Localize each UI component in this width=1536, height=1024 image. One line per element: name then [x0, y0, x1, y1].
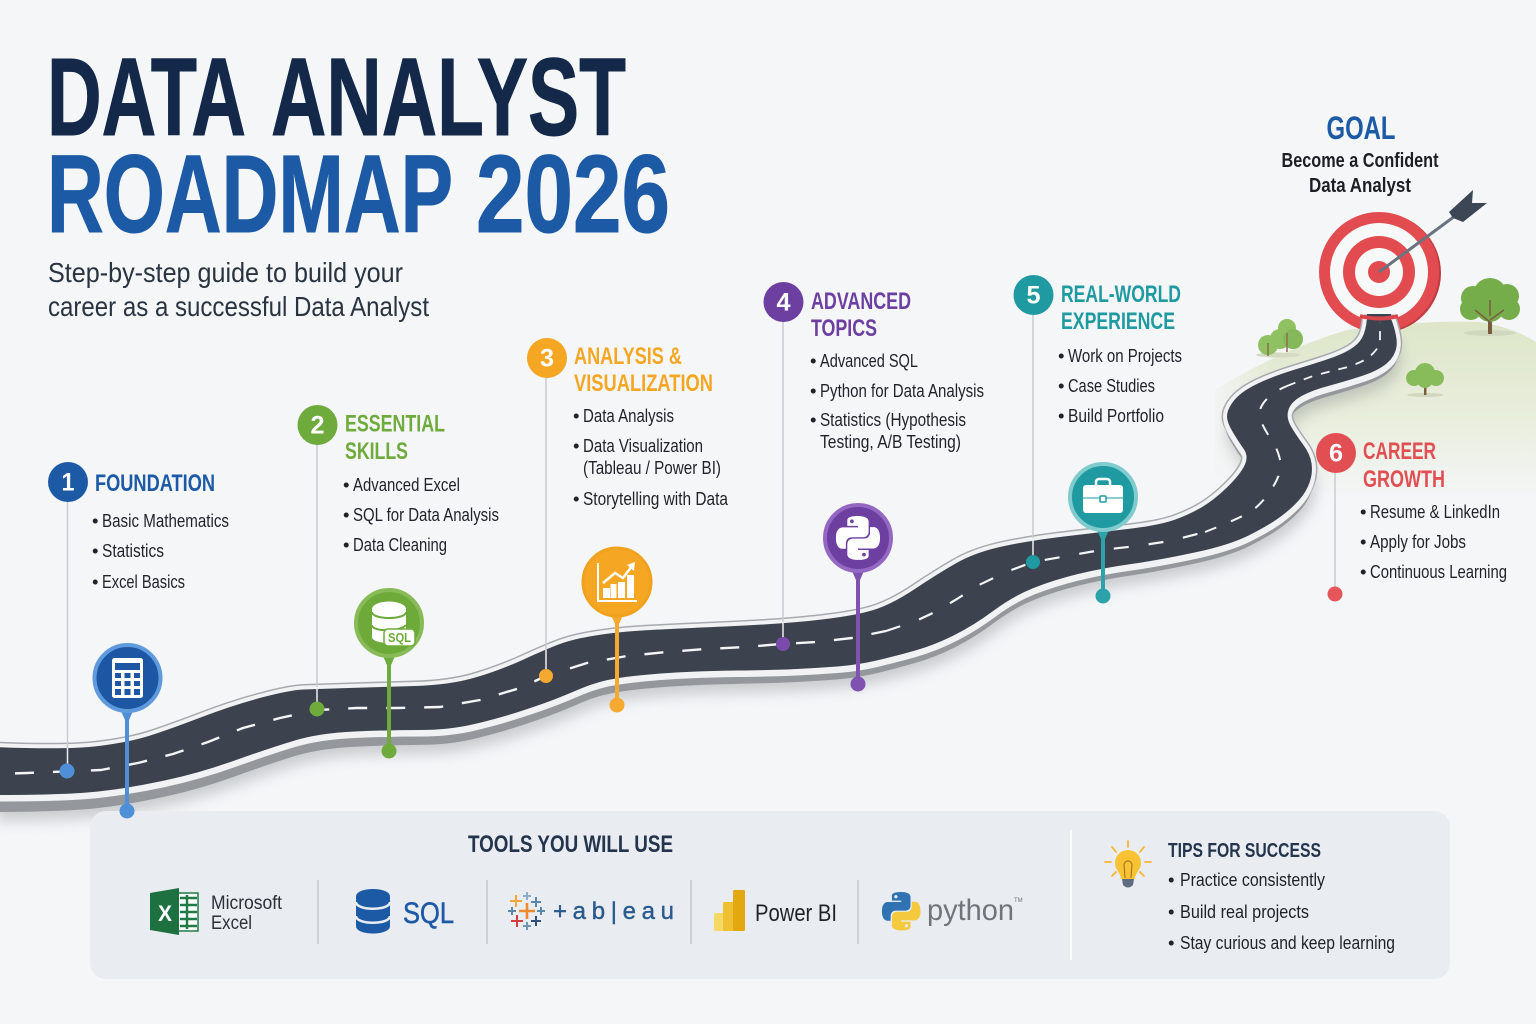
pin 3: chart — [583, 548, 651, 712]
pin 5: briefcase — [1070, 464, 1136, 604]
title: ANALYST — [271, 36, 626, 159]
tips list: Stay curious and keep learning — [1180, 932, 1395, 953]
step 5: real-world experience: REAL-WORLD — [1061, 281, 1181, 308]
tool: Python: python — [927, 894, 1014, 927]
title: 2026 — [476, 133, 670, 256]
step 4: advanced topics: 4 — [776, 288, 791, 316]
subtitle: Step-by-step guide to build your — [48, 257, 403, 288]
step 4: advanced topics: • — [810, 350, 816, 371]
icon: big tree right — [1460, 278, 1520, 336]
step 2: essential skills — [298, 405, 499, 716]
pin 2: database — [356, 590, 422, 758]
tips list: • — [1168, 901, 1174, 922]
goal text: Become a Confident — [1282, 150, 1439, 172]
hill with trees — [1218, 278, 1536, 476]
icon: target with arrow — [1319, 190, 1487, 333]
pin 1: calculator — [94, 645, 160, 818]
tool: Power BI — [714, 890, 837, 931]
step 2: essential skills: • — [343, 474, 349, 495]
tool: SQL — [356, 889, 454, 934]
tool: Excel: Microsoft — [211, 893, 283, 914]
step 5: real-world experience: EXPERIENCE — [1061, 308, 1175, 335]
step 3: analysis and visualization: Storytelling with Data — [583, 488, 729, 509]
step 6: career growth: CAREER — [1363, 438, 1436, 465]
step 2: essential skills: Data Cleaning — [353, 534, 447, 555]
step 3: analysis and visualization: ANALYSIS & — [574, 343, 682, 370]
subtitle: career as a successful Data Analyst — [48, 291, 429, 322]
step 3: analysis and visualization: • — [573, 435, 579, 456]
heading: tools: TOOLS YOU WILL USE — [468, 831, 673, 858]
icon: calculator — [112, 658, 143, 698]
step 5: real-world experience: Work on Projects — [1068, 345, 1182, 366]
heading: tips: TIPS FOR SUCCESS — [1168, 839, 1321, 862]
tool: SQL: SQL — [403, 897, 454, 930]
tips list: • — [1168, 869, 1174, 890]
step 1: foundation: • — [92, 571, 98, 592]
step 6: career growth: • — [1360, 531, 1366, 552]
step 1: foundation: Statistics — [102, 540, 164, 561]
icon: light bulb — [1105, 841, 1151, 888]
step 1: foundation: Excel Basics — [102, 571, 185, 592]
step 1: foundation: FOUNDATION — [95, 470, 215, 497]
step 6: career growth: Apply for Jobs — [1370, 531, 1466, 552]
step 5: real-world experience: • — [1058, 345, 1064, 366]
step 6: career growth: Resume & LinkedIn — [1370, 501, 1500, 522]
panel: tools and tips — [90, 811, 1450, 979]
step 2: essential skills: SQL for Data Analysis — [353, 504, 499, 525]
step 6: career growth: • — [1360, 561, 1366, 582]
step 2: essential skills: 2 — [310, 412, 324, 440]
step 2: essential skills: Advanced Excel — [353, 474, 460, 495]
icon: tree centre — [1406, 363, 1444, 397]
step 4: advanced topics: Statistics (Hypothesis — [820, 409, 966, 430]
step 3: analysis and visualization: 3 — [540, 344, 554, 372]
step 6: career growth: • — [1360, 501, 1366, 522]
step 1: foundation: 1 — [62, 468, 75, 496]
tool: Power BI: Power BI — [755, 900, 837, 927]
icon: growth chart — [598, 562, 637, 601]
icon: sql database — [372, 602, 415, 646]
step 2: essential skills: • — [343, 534, 349, 555]
tool: Excel: Excel — [211, 913, 252, 934]
step 5: real-world experience: Case Studies — [1068, 375, 1155, 396]
step 2: essential skills: • — [343, 504, 349, 525]
step 4: advanced topics: • — [810, 380, 816, 401]
tips list: Practice consistently — [1180, 869, 1326, 890]
goal text: GOAL — [1326, 110, 1396, 146]
step 4: advanced topics — [764, 282, 984, 651]
tips list: • — [1168, 932, 1174, 953]
tool: Excel — [150, 888, 283, 935]
step 6: career growth — [1316, 433, 1507, 602]
tool: Tableau: + a b | e a u — [553, 898, 674, 925]
step 3: analysis and visualization: Data Analysis — [583, 405, 674, 426]
step 4: advanced topics: Advanced SQL — [820, 350, 918, 371]
step 2: essential skills: ESSENTIAL — [345, 410, 445, 438]
step 5: real-world experience: • — [1058, 375, 1064, 396]
step 4: advanced topics: ADVANCED — [811, 288, 911, 315]
tool: Python — [882, 892, 1023, 930]
tips list — [1168, 869, 1395, 953]
icon: sql database: SQL — [388, 630, 411, 645]
step 3: analysis and visualization: (Tableau / Power BI) — [583, 457, 721, 478]
step 6: career growth: GROWTH — [1363, 466, 1445, 493]
tool: Python: TM — [1014, 898, 1023, 904]
step 2: essential skills: SKILLS — [345, 438, 408, 465]
step 6: career growth: Continuous Learning — [1370, 561, 1507, 582]
tool: Excel: X — [158, 901, 172, 926]
step 3: analysis and visualization: • — [573, 405, 579, 426]
icon: briefcase — [1083, 479, 1123, 513]
step 5: real-world experience — [1014, 275, 1182, 569]
step 5: real-world experience: 5 — [1026, 282, 1041, 310]
title: DATA — [47, 36, 246, 159]
step 6: career growth: 6 — [1329, 440, 1343, 468]
tips list: Build real projects — [1180, 901, 1309, 922]
step 1: foundation: Basic Mathematics — [102, 510, 229, 531]
dividers — [318, 880, 858, 944]
goal text — [1282, 110, 1439, 197]
step 3: analysis and visualization: VISUALIZATION — [574, 370, 713, 397]
road centre dashes — [0, 322, 1380, 774]
step 1: foundation — [48, 462, 229, 778]
road — [0, 314, 1401, 821]
icon: small trees left — [1256, 319, 1303, 358]
step 4: advanced topics: TOPICS — [811, 315, 877, 342]
step 4: advanced topics: Python for Data Analysis — [820, 380, 984, 401]
title: ROADMAP — [47, 133, 453, 256]
step 1: foundation: • — [92, 510, 98, 531]
step 5: real-world experience: Build Portfolio — [1068, 405, 1164, 426]
step 4: advanced topics: • — [810, 409, 816, 430]
step 1: foundation: • — [92, 540, 98, 561]
tool: Tableau — [508, 892, 674, 930]
step 4: advanced topics: Testing, A/B Testing) — [820, 431, 961, 452]
step 5: real-world experience: • — [1058, 405, 1064, 426]
title — [47, 36, 670, 256]
step 3: analysis and visualization — [527, 338, 729, 683]
subtitle — [48, 257, 429, 322]
goal text: Data Analyst — [1309, 175, 1411, 197]
step 3: analysis and visualization: • — [573, 488, 579, 509]
step 3: analysis and visualization: Data Visualization — [583, 435, 703, 456]
pin 4: python — [825, 505, 891, 692]
icon: python — [836, 516, 880, 560]
